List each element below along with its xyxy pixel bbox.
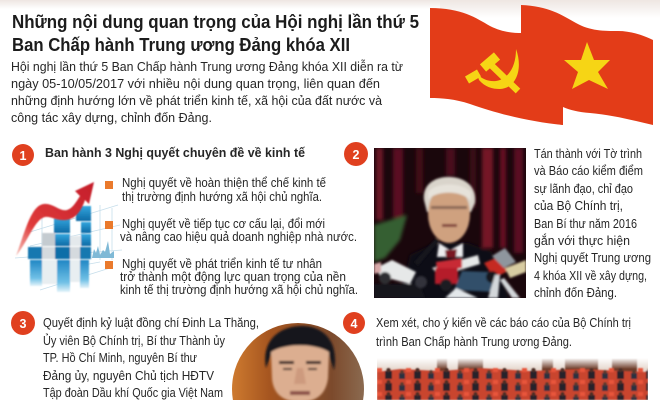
panel 2: report approval [344, 142, 651, 300]
icon: party and national flags [430, 5, 653, 125]
intro text: ngày 05-10/05/2017 với nhiều nội dung quan trọng, liên quan đến [11, 77, 380, 91]
text 3: TP. Hồ Chí Minh, nguyên Bí thư [43, 351, 197, 365]
badge 3 [11, 311, 35, 335]
badge 1: 1 [20, 149, 27, 163]
text 2: của Bộ Chính trị, [534, 199, 623, 213]
text 2: và Báo cáo kiểm điểm [534, 164, 643, 178]
badge 3: 3 [20, 317, 27, 331]
text 2: sự lãnh đạo, chỉ đạo [534, 182, 633, 196]
bullet 2: Nghị quyết về tiếp tục cơ cấu lại, đổi mới [122, 217, 325, 231]
text 4: trình Ban Chấp hành Trung ương Đảng. [376, 335, 572, 349]
badge 4: 4 [351, 317, 358, 331]
text 2: Tán thành với Tờ trình [534, 147, 642, 161]
title: Những nội dung quan trọng của Hội nghị lần thứ 5 [12, 11, 419, 32]
bullet 3 [105, 257, 358, 297]
text 2: Ban Bí thư năm 2016 [534, 217, 637, 231]
intro text: công tác xây dựng, chỉnh đốn Đảng. [11, 111, 212, 125]
text 3: Ủy viên Bộ Chính trị, Bí thư Thành ủy [43, 333, 226, 348]
bullet 3: kinh tế thị trường định hướng xã hội chủ nghĩa. [120, 283, 358, 297]
badge 1 [12, 144, 34, 166]
bullet 1: Nghị quyết về hoàn thiện thể chế kinh tế [122, 176, 326, 190]
photo: speaker at microphones [374, 148, 526, 300]
bullet 1 [105, 176, 326, 204]
title: Ban Chấp hành Trung ương Đảng khóa XII [12, 34, 350, 55]
panel 1: economic resolutions [12, 144, 358, 297]
intro text: những định hướng lớn về phát triển kinh tế, xã hội của đất nước và [11, 94, 382, 108]
bullet 3: Nghị quyết về phát triển kinh tế tư nhân [122, 257, 322, 271]
intro text: Hội nghị lần thứ 5 Ban Chấp hành Trung ương Đảng khóa XII diễn ra từ [11, 59, 403, 74]
title [12, 11, 419, 55]
badge 2 [344, 142, 368, 166]
chart illustration: rising bars and red arrow [15, 182, 122, 292]
badge 2: 2 [353, 148, 360, 162]
text 2: chỉnh đốn Đảng. [534, 286, 617, 300]
photo: round portrait [230, 320, 366, 400]
panel 4: politburo reports [343, 312, 648, 400]
bullet 2 [105, 217, 357, 244]
text 3: Tập đoàn Dầu khí Quốc gia Việt Nam [43, 386, 223, 400]
bullet 3: trở thành một động lực quan trọng của nền [120, 270, 346, 284]
text 2 [534, 147, 651, 300]
text 3: Đảng ủy, nguyên Chủ tịch HĐTV [43, 369, 215, 383]
bullet 2: và nâng cao hiệu quả doanh nghiệp nhà nước. [120, 230, 357, 244]
heading 1: Ban hành 3 Nghị quyết chuyên đề về kinh tế [45, 146, 305, 160]
text 3 [43, 316, 259, 400]
bullet 1: thị trường định hướng xã hội chủ nghĩa. [122, 190, 322, 204]
text 2: gắn với thực hiện [534, 233, 630, 248]
photo: conference hall crowd [377, 358, 648, 400]
flag: yellow star [521, 5, 653, 125]
text 4: Xem xét, cho ý kiến về các báo cáo của Bộ Chính trị [376, 316, 631, 330]
text 2: Nghị quyết Trung ương [534, 251, 651, 265]
flag: hammer and sickle [430, 8, 563, 125]
text 3: Quyết định kỷ luật đồng chí Đinh La Thăng, [43, 316, 259, 330]
badge 4 [343, 312, 365, 334]
text 4 [376, 316, 631, 349]
panel 3: disciplinary decision [11, 311, 366, 400]
intro text [11, 59, 403, 125]
